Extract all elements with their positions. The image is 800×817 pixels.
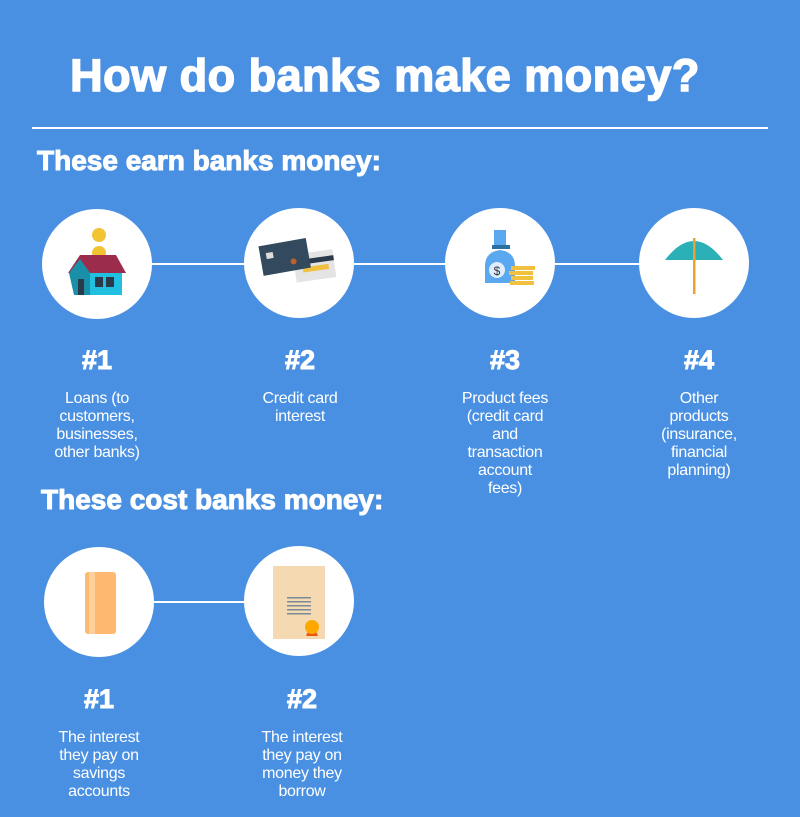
- label 1: #1: [82, 345, 112, 375]
- icon: credit cards: [244, 208, 354, 318]
- label 1: Loans (to customers, businesses, other banks): [54, 390, 140, 461]
- icon: money bag: $: [494, 264, 501, 278]
- label 2: #2: [285, 345, 315, 375]
- label cost 1: The interest they pay on savings accounts: [59, 729, 139, 800]
- label 3: #3: [490, 345, 520, 375]
- icon: umbrella: [639, 208, 749, 318]
- label 2: Credit card interest: [263, 390, 337, 425]
- label 1: [54, 345, 140, 461]
- icon: certificate: [244, 546, 354, 656]
- label 4: Other products (insurance, financial planning): [661, 390, 737, 479]
- label 2: [263, 345, 337, 425]
- label cost 2: [262, 684, 343, 800]
- label cost 2: The interest they pay on money they borrow: [262, 729, 342, 800]
- label 4: [661, 345, 737, 479]
- icon: house with coins: [42, 209, 152, 319]
- label cost 1: [58, 684, 140, 800]
- label cost 1: #1: [84, 684, 114, 714]
- label 3: Product fees (credit card and transaction account fees): [462, 390, 548, 497]
- icon: money bag: [445, 208, 555, 318]
- title: How do banks make money?: [70, 50, 700, 101]
- icon: savings book: [44, 547, 154, 657]
- label cost 2: #2: [287, 684, 317, 714]
- heading: cost: These cost banks money:: [41, 484, 383, 515]
- label 4: #4: [684, 345, 714, 375]
- heading: earn: These earn banks money:: [37, 145, 381, 176]
